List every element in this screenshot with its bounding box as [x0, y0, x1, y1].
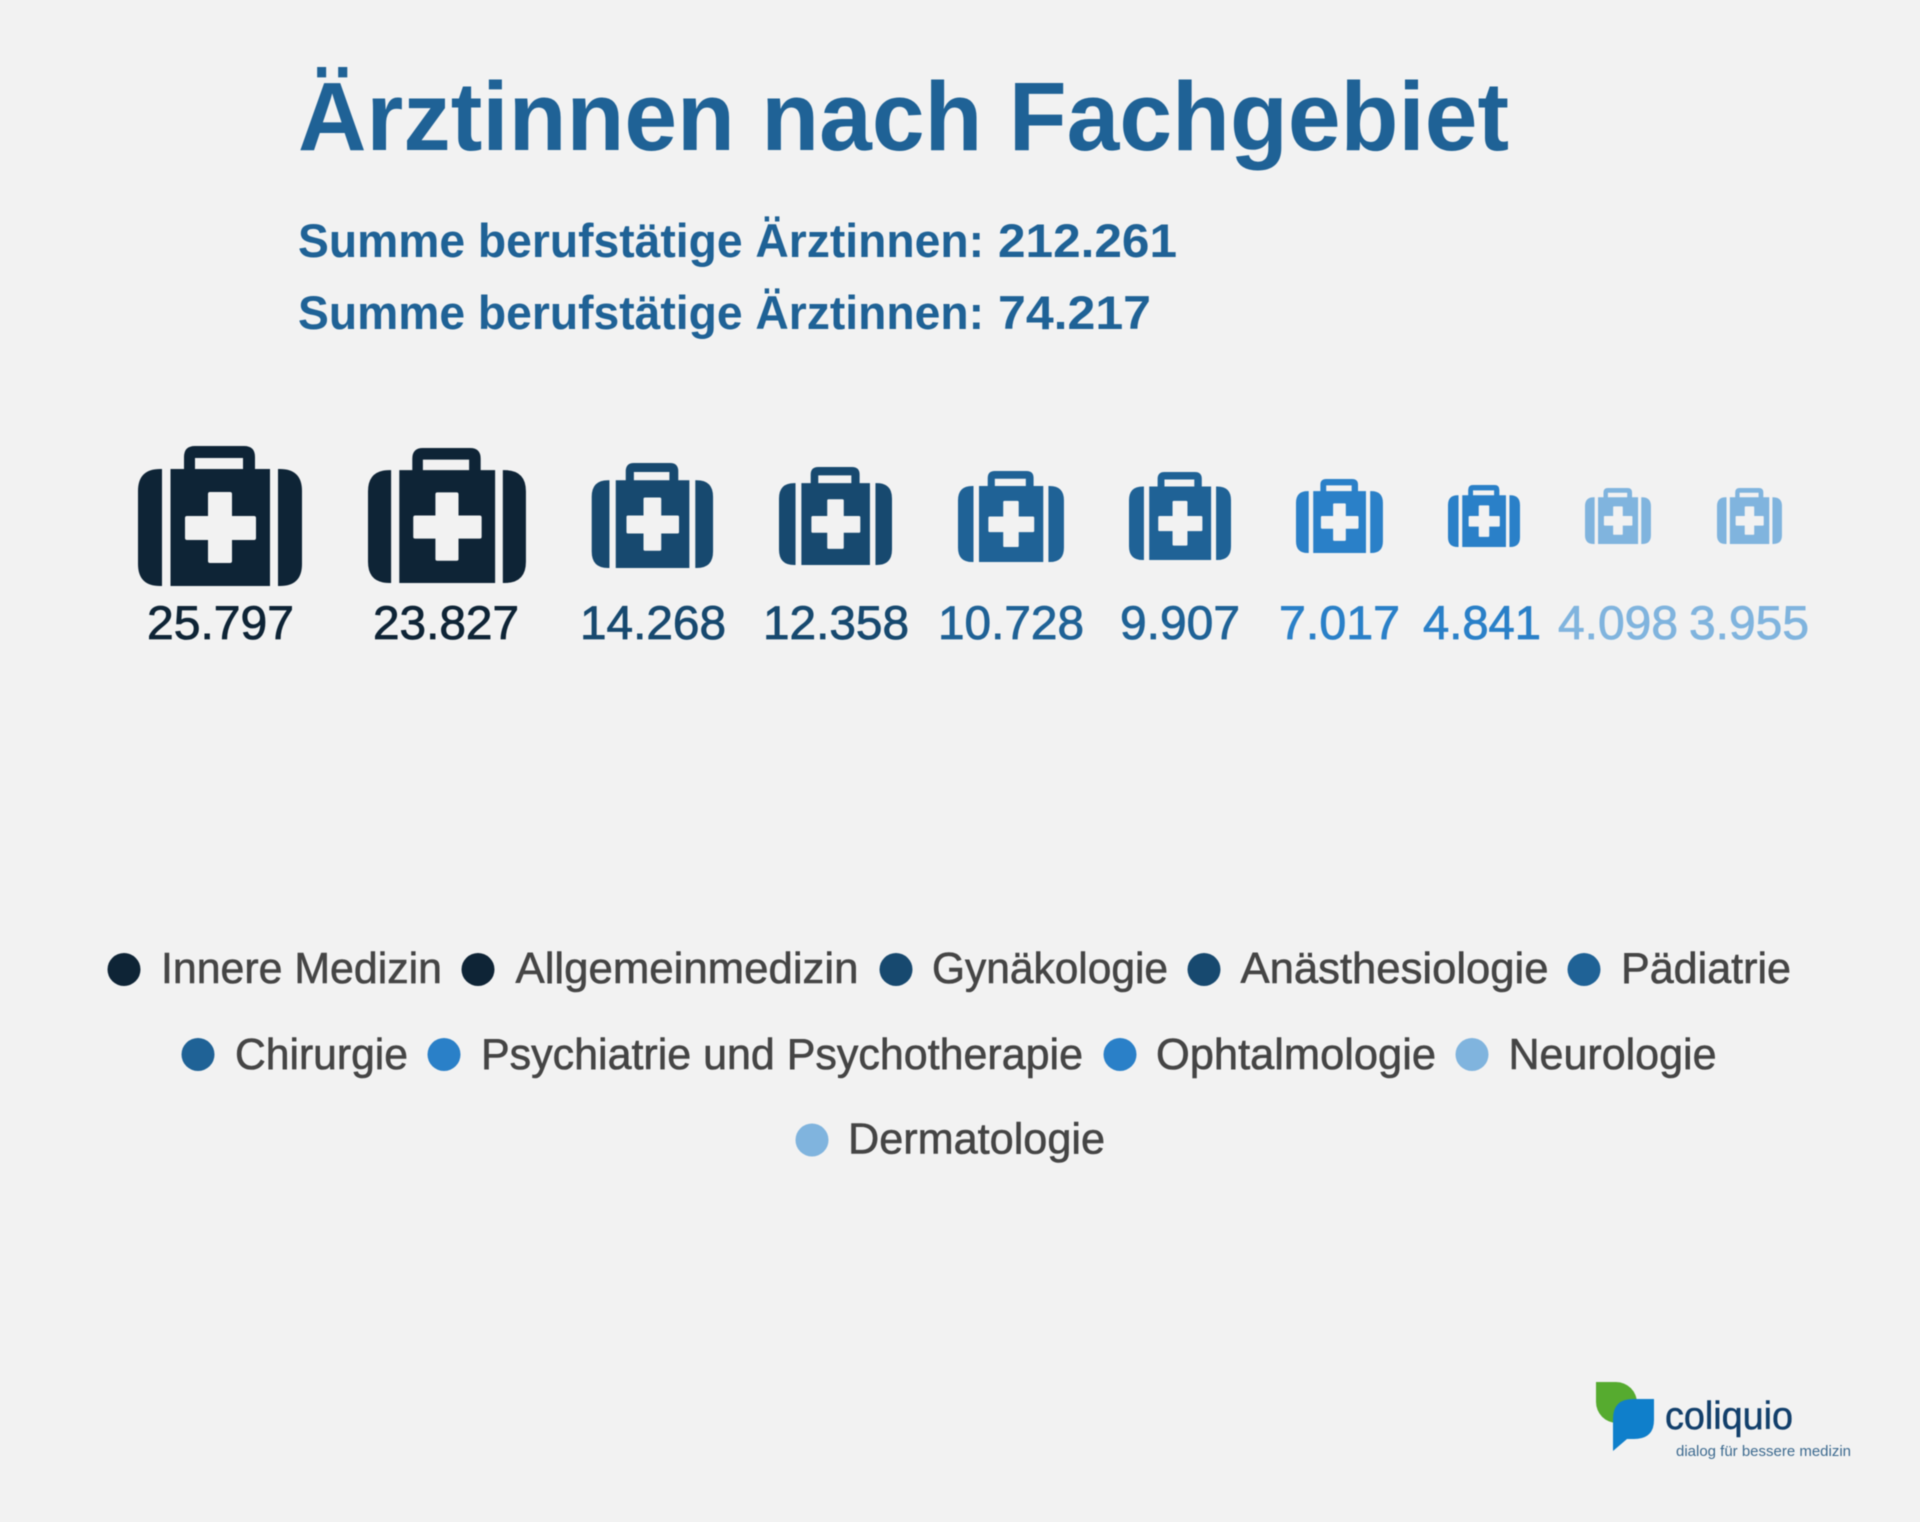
column: Pädiatrie — [938, 471, 1084, 649]
icon: medical bag — [779, 467, 892, 565]
legend item: Chirurgie: Chirurgie — [235, 1030, 408, 1079]
legend item: Anästhesiologie: Anästhesiologie — [1240, 944, 1548, 993]
logo tagline: dialog für bessere medizin — [1676, 1443, 1851, 1460]
column: Neurologie — [1558, 488, 1678, 649]
value: 25.797 — [147, 596, 294, 649]
legend — [108, 944, 1791, 1164]
value: 4.098 — [1558, 596, 1678, 649]
icon: medical bag — [1585, 488, 1651, 544]
icon: medical bag — [1129, 472, 1231, 560]
icon: medical bag — [1448, 485, 1520, 547]
column: Psychiatrie und Psychotherapie — [1279, 479, 1400, 649]
logo wordmark: coliquio — [1665, 1395, 1793, 1438]
logo mark: blue speech bubble — [1613, 1399, 1654, 1451]
column: Gynäkologie — [580, 463, 726, 649]
icon: medical bag — [592, 463, 713, 568]
value: 4.841 — [1423, 596, 1541, 649]
column: Anästhesiologie — [763, 467, 909, 649]
legend item: Pädiatrie: Pädiatrie — [1621, 944, 1791, 993]
legend item: Dermatologie: Dermatologie — [848, 1114, 1105, 1164]
logo: coliquio — [1596, 1382, 1851, 1460]
icon: medical bag — [368, 448, 526, 583]
column: Innere Medizin — [138, 446, 302, 649]
column: Chirurgie — [1120, 472, 1240, 649]
subtitle: second total: Summe berufstätige Ärztinnen: — [298, 286, 984, 339]
value: 9.907 — [1120, 596, 1240, 649]
icon chart: doctor's bags by specialty — [138, 446, 1809, 649]
icon: medical bag — [138, 446, 302, 586]
value: 23.827 — [373, 596, 519, 649]
value: 10.728 — [938, 596, 1084, 649]
value: 7.017 — [1279, 596, 1400, 649]
value: 12.358 — [763, 596, 909, 649]
value: 14.268 — [580, 596, 726, 649]
column: Ophtalmologie — [1423, 485, 1541, 649]
logo mark: green leaf — [1596, 1382, 1637, 1423]
column: Dermatologie — [1689, 488, 1809, 649]
legend item: Ophtalmologie: Ophtalmologie — [1156, 1030, 1436, 1079]
subtitle: total female physicians: 212.261 — [998, 214, 1177, 267]
subtitle: second total: 74.217 — [998, 286, 1151, 339]
legend item: Gynäkologie: Gynäkologie — [932, 944, 1168, 993]
legend item: Innere Medizin: Innere Medizin — [161, 944, 442, 993]
value: 3.955 — [1689, 596, 1809, 649]
legend item: Psychiatrie und Psychotherapie: Psychiatrie und Psychotherapie — [481, 1030, 1083, 1079]
subtitle: total female physicians: Summe berufstätige Ärztinnen: — [298, 214, 984, 267]
legend item: Allgemeinmedizin: Allgemeinmedizin — [516, 944, 858, 993]
icon: medical bag — [1296, 479, 1383, 553]
icon: medical bag — [1717, 488, 1782, 544]
icon: medical bag — [958, 471, 1064, 562]
column: Allgemeinmedizin — [368, 448, 526, 649]
legend item: Neurologie: Neurologie — [1508, 1030, 1716, 1079]
title: Ärztinnen nach Fachgebiet — [298, 62, 1509, 171]
